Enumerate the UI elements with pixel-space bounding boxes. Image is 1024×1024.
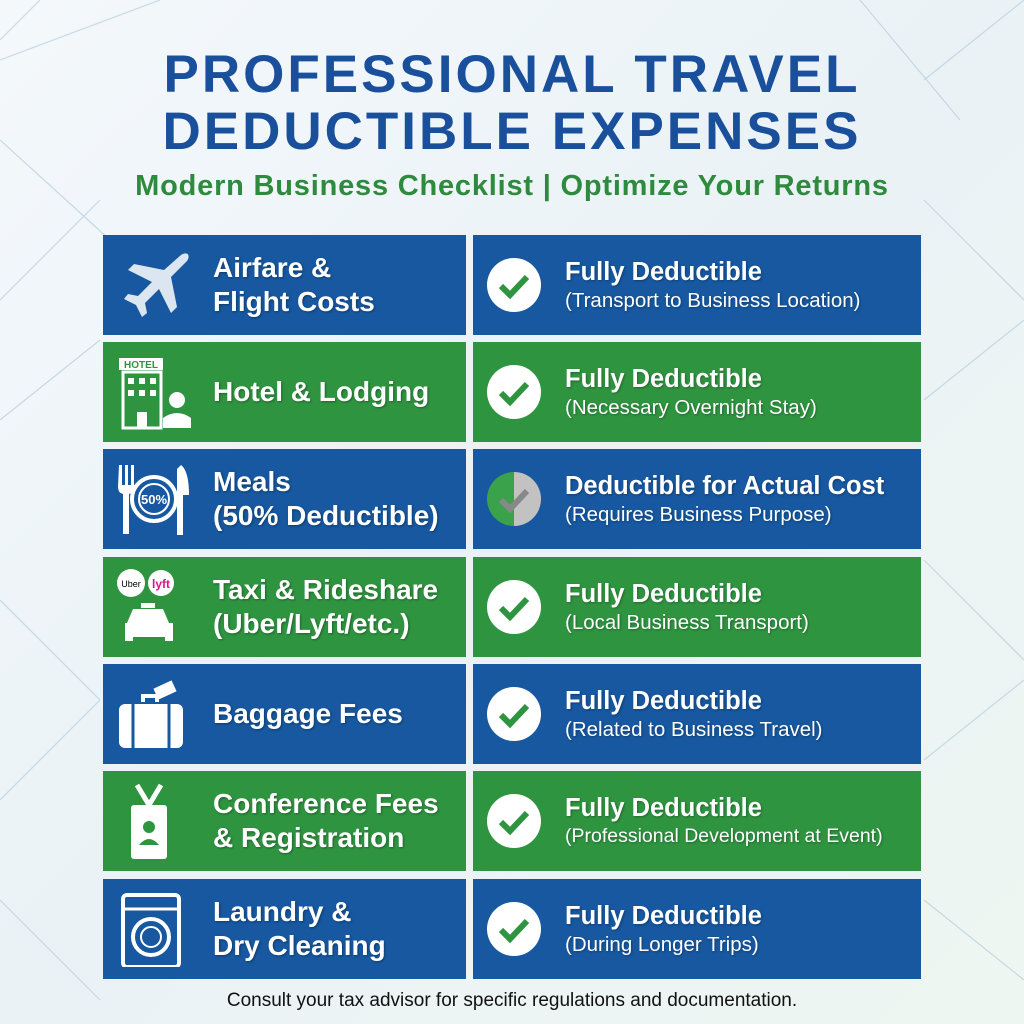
- row 7 left: laundry: [103, 879, 466, 979]
- row 1 left: airfare: Airfare &: [213, 252, 331, 283]
- icon: partial check: [487, 472, 541, 526]
- icon: check: [487, 258, 541, 312]
- icon: plane: [124, 253, 189, 317]
- row 5 left: baggage: [103, 664, 466, 764]
- row 6 left: conference: [103, 771, 466, 871]
- icon: check: [487, 794, 541, 848]
- title: DEDUCTIBLE EXPENSES: [162, 102, 862, 161]
- icon: check: [487, 902, 541, 956]
- icon: check: [487, 580, 541, 634]
- row 3 right: [473, 449, 921, 549]
- row 5 right: (Related to Business Travel): [565, 718, 823, 740]
- row 6 right: (Professional Development at Event): [565, 824, 883, 846]
- row 5 right: Fully Deductible: [565, 686, 762, 714]
- row 1 right: (Transport to Business Location): [565, 288, 860, 312]
- icon: hotel: HOTEL: [124, 360, 158, 371]
- icon: suitcase: [119, 680, 183, 748]
- row 4 left: taxi: [103, 557, 466, 657]
- row 2 left: hotel: [103, 342, 466, 442]
- row 3 left: meals: (50% Deductible): [213, 500, 439, 531]
- row 7 right: (During Longer Trips): [565, 932, 759, 956]
- row 6 right: [473, 771, 921, 871]
- icon: washer: [121, 893, 181, 967]
- row 7 left: laundry: Laundry &: [213, 896, 351, 927]
- row 1 left: airfare: [103, 235, 466, 335]
- row 7 right: [473, 879, 921, 979]
- row 1 right: [473, 235, 921, 335]
- icon: taxi: Uber: [121, 579, 141, 589]
- row 2 right: [473, 342, 921, 442]
- title: [162, 45, 862, 161]
- icon: check: [487, 365, 541, 419]
- row 4 right: Fully Deductible: [565, 580, 762, 608]
- icon: check: [487, 687, 541, 741]
- row 6 left: conference: & Registration: [213, 822, 404, 853]
- row 4 right: (Local Business Transport): [565, 610, 809, 634]
- icon: taxi: lyft: [152, 577, 170, 591]
- row 1 right: Fully Deductible: [565, 258, 762, 286]
- icon: plate: 50%: [141, 492, 167, 507]
- row 2 left: hotel: Hotel & Lodging: [213, 376, 429, 407]
- icon: badge: [131, 784, 167, 859]
- row 5 right: [473, 664, 921, 764]
- row 7 right: Fully Deductible: [565, 902, 762, 930]
- row 6 right: Fully Deductible: [565, 794, 762, 822]
- row 3 right: (Requires Business Purpose): [565, 502, 832, 526]
- row 2 right: (Necessary Overnight Stay): [565, 396, 817, 418]
- title: PROFESSIONAL TRAVEL: [164, 45, 860, 104]
- row 7 left: laundry: Dry Cleaning: [213, 930, 386, 961]
- row 1 left: airfare: Flight Costs: [213, 286, 375, 317]
- row 3 left: meals: Meals: [213, 466, 291, 497]
- row 3 left: meals: [103, 449, 466, 549]
- icon: taxi: [117, 569, 174, 641]
- row 2 right: Fully Deductible: [565, 364, 762, 392]
- icon: hotel: [119, 358, 191, 430]
- row 4 left: taxi: (Uber/Lyft/etc.): [213, 608, 410, 639]
- row 3 right: Deductible for Actual Cost: [565, 472, 884, 500]
- icon: plate: [118, 465, 189, 535]
- row 6 left: conference: Conference Fees: [213, 788, 439, 819]
- row 4 left: taxi: Taxi & Rideshare: [213, 574, 438, 605]
- footer: Consult your tax advisor for specific regulations and documentation.: [227, 990, 797, 1011]
- row 4 right: [473, 557, 921, 657]
- subtitle: Modern Business Checklist | Optimize Your Returns: [135, 170, 889, 202]
- row 5 left: baggage: Baggage Fees: [213, 698, 403, 729]
